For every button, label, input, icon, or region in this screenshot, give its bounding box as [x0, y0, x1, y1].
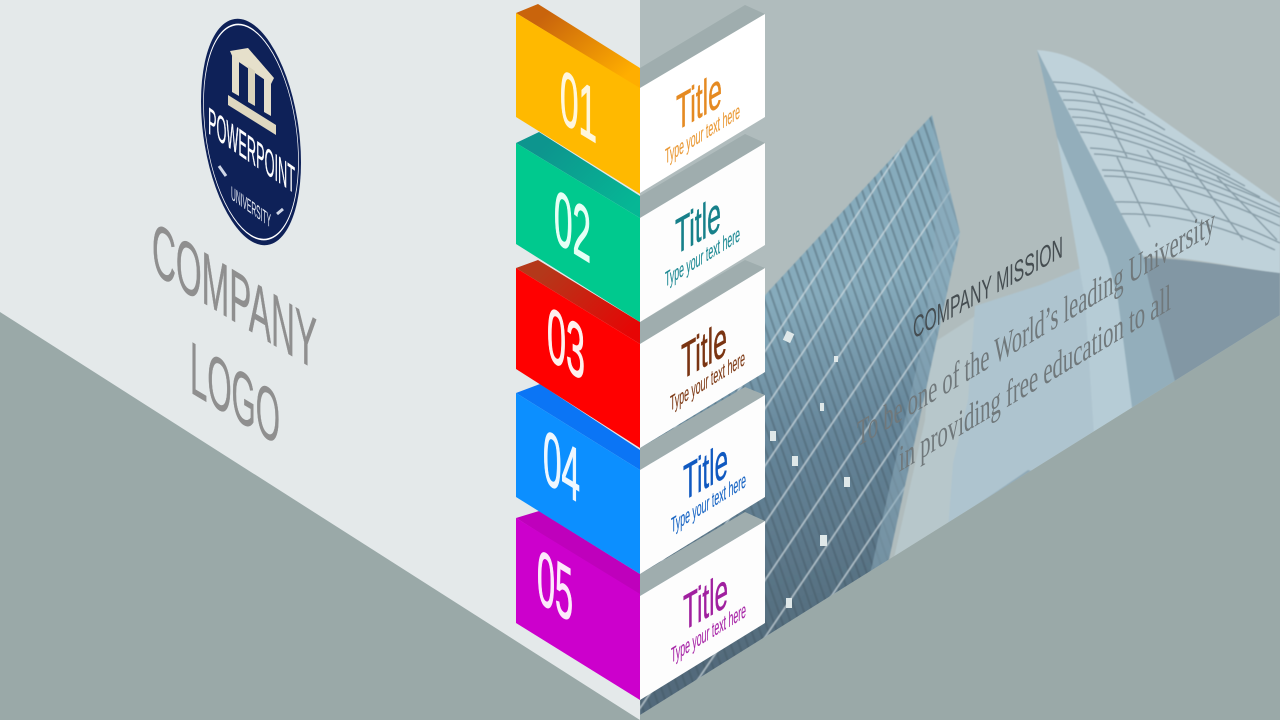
badge disc [201, 0, 301, 271]
company logo text [152, 206, 317, 463]
card [640, 143, 765, 322]
company logo badge [201, 0, 301, 271]
card [640, 268, 765, 448]
panel: item 02 [516, 132, 765, 322]
panel: item 02: 02 [554, 172, 591, 280]
ground haze between towers [894, 318, 974, 556]
card [640, 14, 765, 193]
right tower upper face [1037, 50, 1280, 273]
panel: item 02: Title [675, 185, 721, 266]
number block [516, 268, 640, 448]
number block [516, 143, 640, 322]
panel: item 05: Type your text here [671, 597, 746, 668]
right wall [640, 0, 1280, 715]
card [640, 395, 765, 574]
panel: item 03 [516, 260, 765, 448]
company logo text: LOGO [190, 326, 280, 463]
number block [516, 13, 640, 194]
panel: item 04 [516, 384, 765, 574]
top face [516, 384, 640, 470]
badge marks [219, 166, 283, 214]
right tower lower face [1143, 258, 1280, 380]
right tower grid [1053, 82, 1280, 250]
company mission heading: COMPANY MISSION [913, 229, 1063, 346]
icon: temple [228, 48, 276, 135]
panel: item 04: 04 [543, 412, 580, 520]
top face [516, 4, 640, 89]
panel: item 03: Type your text here [670, 345, 745, 416]
panel: item 01 [516, 4, 765, 194]
top face [516, 260, 640, 344]
tower windows [770, 331, 850, 608]
panel: building photo [640, 50, 1280, 720]
number block [516, 518, 640, 700]
panel: item 05 [516, 511, 765, 700]
shelf top [640, 5, 765, 89]
panel: item 04: Title [683, 431, 728, 512]
top face [516, 132, 640, 218]
panel: item 01: Title [676, 61, 722, 142]
panel: item 03: Title [681, 310, 727, 391]
infographic canvas: COMPANY [152, 206, 317, 388]
panel: item 04: Type your text here [671, 467, 746, 538]
infographic canvas: POWERPOINT [208, 99, 295, 202]
left wall [0, 0, 640, 720]
card [640, 521, 765, 700]
shelf top [640, 387, 765, 470]
panel: item 02: Type your text here [665, 221, 740, 292]
shelf top [640, 260, 765, 344]
panel: item 01: Type your text here [665, 98, 740, 169]
company logo badge: UNIVERSITY [231, 182, 271, 232]
panel: item 05: Title [683, 561, 728, 642]
left tower [640, 115, 960, 720]
mission statement [857, 199, 1215, 480]
shelf top [640, 512, 765, 596]
center tower [950, 269, 1094, 521]
top face [516, 511, 640, 596]
right tower side strip [1038, 52, 1175, 408]
shelf top [640, 134, 765, 218]
pale tower behind [1058, 140, 1121, 322]
panel: item 05: 05 [537, 532, 573, 639]
panel: item 01: 01 [560, 52, 597, 160]
number block [516, 393, 640, 574]
panel: item 03: 03 [547, 289, 585, 398]
